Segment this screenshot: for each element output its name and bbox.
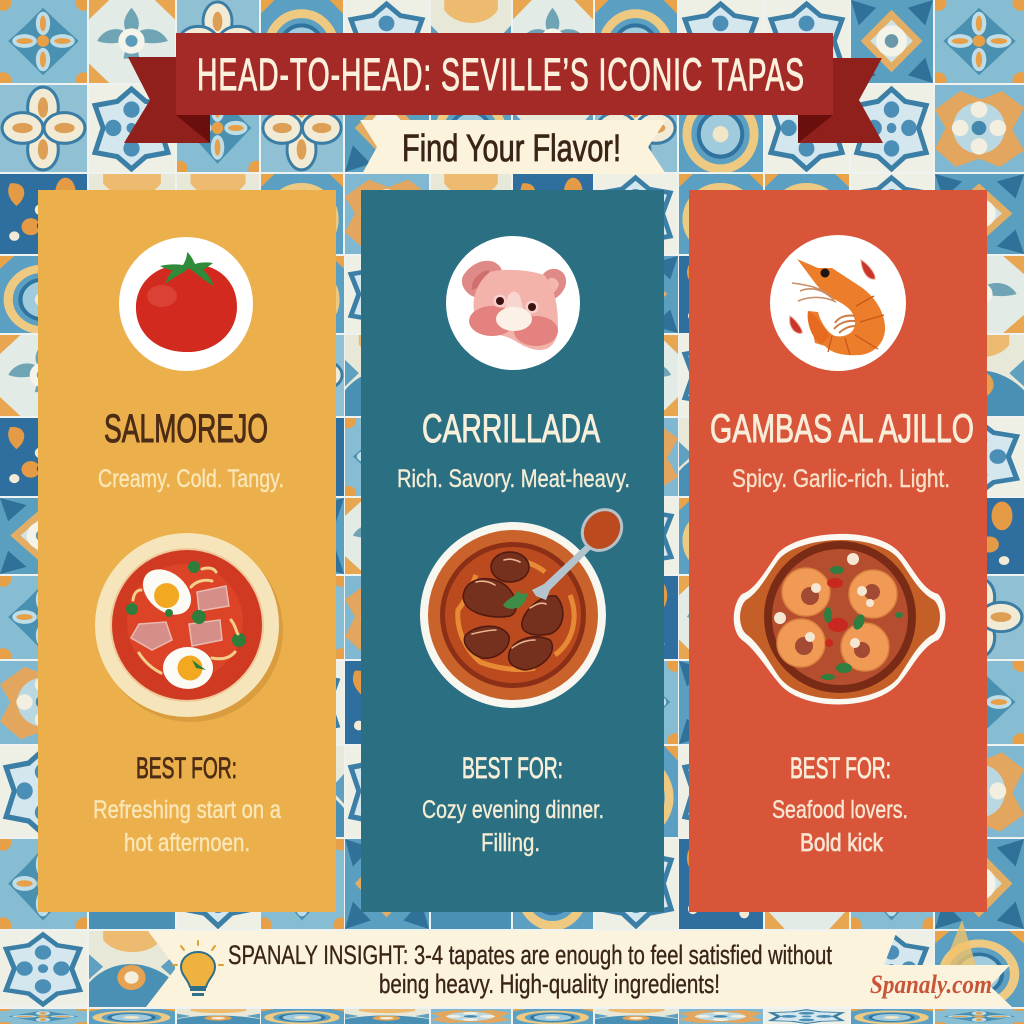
pork cheeks bbox=[463, 552, 563, 670]
insight text: being heavy. High-quality ingredients! bbox=[379, 969, 720, 999]
subtitle banner bbox=[360, 120, 666, 174]
tagline: gambas: Spicy. Garlic-rich. Light. bbox=[732, 465, 950, 493]
meat highlights bbox=[472, 559, 546, 648]
description: carrillada: Cozy evening dinner. bbox=[422, 796, 604, 824]
herb garnish bbox=[503, 590, 528, 609]
ribbon band bbox=[176, 33, 833, 115]
insight text: SPANALY INSIGHT: 3-4 tapates are enough to feel satisfied without bbox=[228, 940, 832, 970]
description: salmorejo: hot afternoen. bbox=[124, 829, 250, 857]
panel: gambas al ajillo bbox=[689, 190, 987, 912]
brand tab bbox=[860, 965, 1012, 1007]
shrimp in pan bbox=[777, 568, 897, 671]
description: salmorejo bbox=[93, 796, 281, 857]
dish: salmorejo bowl bbox=[95, 533, 283, 722]
dish: carrillada bowl bbox=[420, 500, 632, 708]
insight text bbox=[228, 940, 832, 999]
brand name: Spanaly.com bbox=[870, 970, 992, 999]
title ribbon bbox=[124, 33, 883, 143]
ribbon right tail bbox=[798, 58, 883, 143]
best for label: carrillada: BEST FOR: bbox=[462, 752, 563, 785]
description: gambas: Bold kick bbox=[800, 829, 883, 857]
subtitle: Find Your Flavor! bbox=[402, 128, 621, 170]
heading: salmorejo: SALMOREJO bbox=[104, 407, 268, 451]
egg top bbox=[134, 560, 200, 624]
tagline: salmorejo: Creamy. Cold. Tangy. bbox=[98, 465, 284, 493]
description: gambas: Seafood lovers. bbox=[772, 796, 908, 824]
icon: shrimp bbox=[770, 235, 906, 371]
description: carrillada: Filling. bbox=[481, 829, 540, 857]
egg bottom bbox=[163, 647, 213, 689]
icon: light bulb bbox=[173, 941, 223, 996]
ribbon left tail bbox=[124, 57, 210, 143]
herbs bbox=[126, 561, 246, 670]
best for label: salmorejo: BEST FOR: bbox=[136, 752, 237, 785]
best for label: gambas: BEST FOR: bbox=[790, 752, 891, 785]
tagline: carrillada: Rich. Savory. Meat-heavy. bbox=[397, 465, 630, 493]
banner band bbox=[146, 931, 897, 1007]
spoon bbox=[532, 500, 632, 600]
panel: salmorejo bbox=[38, 190, 336, 912]
description: gambas bbox=[772, 796, 908, 857]
description: salmorejo: Refreshing start on a bbox=[93, 796, 281, 824]
heading: carrillada: CARRILLADA bbox=[422, 407, 600, 451]
panel: carrillada bbox=[361, 190, 664, 912]
dish: gambas cazuela bbox=[734, 534, 946, 704]
icon: pig bbox=[446, 236, 580, 370]
sauce drizzle bbox=[133, 568, 238, 673]
brand sparkle bbox=[944, 920, 976, 965]
insight banner bbox=[146, 920, 1012, 1007]
description: carrillada bbox=[422, 796, 604, 857]
chilli and herbs bbox=[825, 578, 848, 647]
bacon slices bbox=[131, 586, 229, 650]
icon: tomato bbox=[119, 237, 253, 371]
